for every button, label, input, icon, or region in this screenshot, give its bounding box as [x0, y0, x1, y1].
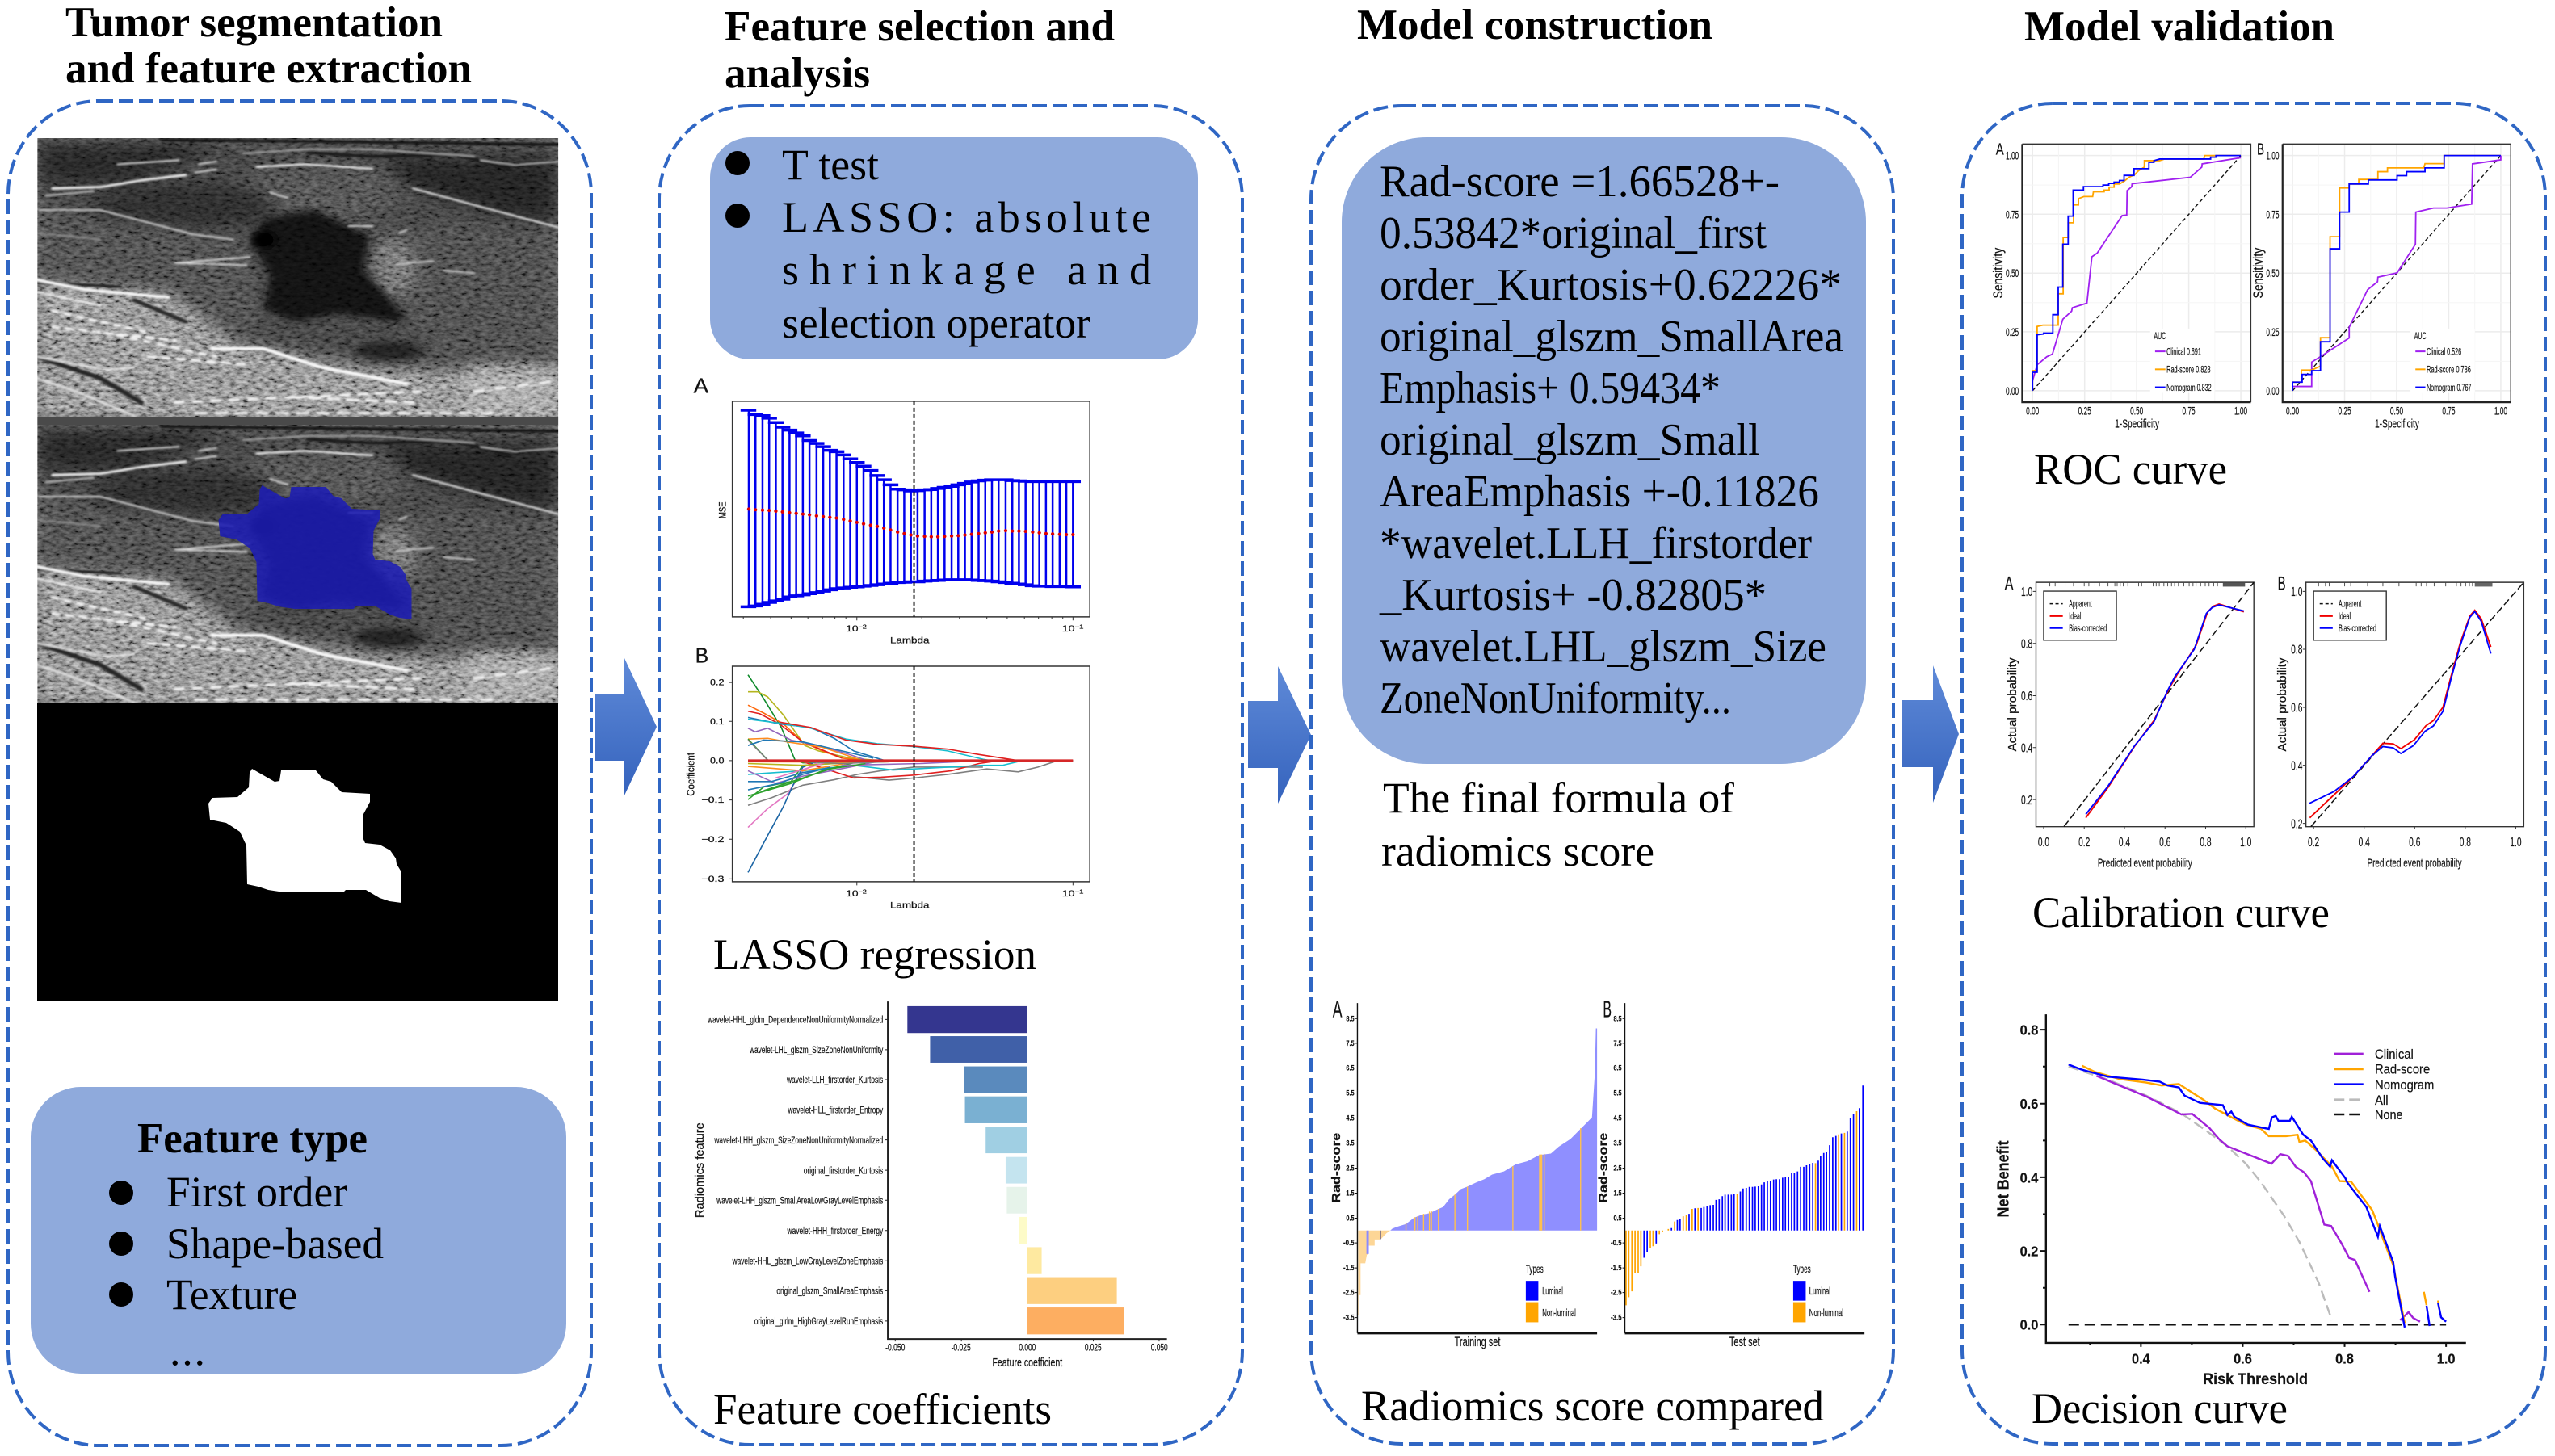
chart: rad-score test set: Test set: [1729, 1335, 1760, 1349]
chart: ROC curve B: 0.75: [2442, 405, 2456, 417]
panel: tumor segmentation: [8, 0, 591, 1446]
chart: feature coefficients bar chart: Radiomics feature: [693, 1122, 707, 1218]
chart: calibration curve A: 0.8: [2200, 835, 2212, 849]
chart: feature coefficients bar chart: [693, 1001, 1168, 1370]
chart: rad-score training set: 2.5: [1346, 1165, 1355, 1173]
chart: feature coefficients bar chart: Feature coefficient: [992, 1356, 1062, 1370]
chart: calibration curve A: 0.4: [2119, 835, 2130, 849]
callout: feature type: Texture: [166, 1270, 297, 1319]
callout: selection methods: selection operator: [782, 299, 1090, 347]
label: LASSO regression: LASSO regression: [713, 930, 1036, 979]
chart: ROC curve B: 0.25: [2338, 405, 2351, 417]
panel: feature selection: [659, 3, 1242, 1445]
chart: ROC curve A: 0.00: [2026, 405, 2039, 417]
callout: radiomics formula: Rad-score =1.66528+-: [1380, 157, 1780, 207]
chart: ROC curve B: 0.50: [2266, 266, 2279, 279]
legend: calibration: Apparent: [2339, 599, 2361, 610]
chart: ROC curve A: Sensitivity: [1991, 247, 2007, 298]
chart: rad-score training set: -0.5: [1343, 1240, 1355, 1248]
chart: feature coefficients bar chart: wavelet-HHL_gldm_DependenceNonUniformityNormalized: [708, 1013, 883, 1025]
chart: ROC curve A: 0.75: [2006, 208, 2019, 221]
legend: AUC: [2410, 329, 2475, 393]
chart: feature coefficients bar chart: wavelet-HLL_firstorder_Entropy: [788, 1104, 883, 1115]
chart: rad-score training set: 1.5: [1346, 1190, 1355, 1198]
chart: rad-score training set: Training set: [1455, 1335, 1501, 1349]
label: radiomics score compared: Radiomics score compared: [1361, 1382, 1824, 1430]
callout: radiomics formula: 0.53842*original_first: [1380, 208, 1767, 258]
heading: tumor segmentation: [65, 0, 472, 92]
chart: calibration curve A: 1.0: [2021, 585, 2032, 598]
chart: rad-score test set: 3.5: [1613, 1140, 1622, 1148]
chart: rad-score test set: 5.5: [1613, 1090, 1622, 1097]
chart: rad-score training set: Rad-score: [1330, 1133, 1343, 1203]
chart: calibration curve A: Actual probability: [2005, 657, 2019, 751]
chart: ROC curve B: B: [2257, 141, 2264, 158]
chart: LASSO coefficient paths: 10: [1062, 890, 1073, 899]
panel: model construction: [1311, 2, 1893, 1444]
binary mask image: [37, 703, 558, 1001]
chart: ROC curve B: 0.75: [2266, 208, 2279, 221]
chart: rad-score test set: 7.5: [1613, 1040, 1622, 1048]
chart: ROC curve A: A: [1996, 141, 2004, 158]
callout: feature type: ...: [170, 1326, 205, 1374]
legend: decision curve: Nomogram: [2375, 1077, 2434, 1093]
chart: LASSO cross-validation MSE: A: [694, 375, 708, 397]
chart: ROC curve B: Rad-score 0.786: [2427, 365, 2471, 376]
heading: tumor segmentation: Tumor segmentation: [65, 0, 443, 46]
callout: radiomics formula: original_glszm_SmallArea: [1380, 312, 1843, 362]
chart: calibration curve B: 0.2: [2291, 817, 2302, 831]
callout: radiomics formula: [1342, 137, 1866, 764]
chart: rad-score training set: 5.5: [1346, 1090, 1355, 1097]
chart: calibration curve B: 1.0: [2291, 585, 2302, 598]
chart: ROC curve A: [1991, 141, 2250, 430]
callout: selection methods: LASSO: absolute: [782, 193, 1151, 241]
chart: rad-score training set: 7.5: [1346, 1040, 1355, 1048]
chart: calibration curve A: 0.8: [2021, 637, 2032, 651]
callout: radiomics formula: *wavelet.LLH_firstorder: [1380, 518, 1812, 569]
legend: decision curve: None: [2375, 1108, 2403, 1122]
chart: ROC curve B: Nomogram 0.767: [2427, 383, 2471, 393]
chart: LASSO coefficient paths: B: [695, 644, 708, 667]
chart: calibration curve A: 0.0: [2038, 835, 2049, 849]
chart: calibration curve B: 0.8: [2460, 835, 2471, 849]
chart: ROC curve B: 0.25: [2266, 325, 2279, 338]
chart: rad-score training set: -1.5: [1343, 1265, 1355, 1273]
chart: calibration curve B: 1.0: [2510, 835, 2522, 849]
chart: ROC curve B: [2251, 141, 2511, 430]
chart: calibration curve B: 0.6: [2409, 835, 2420, 849]
chart: feature coefficients bar chart: wavelet-LHH_glszm_SizeZoneNonUniformityNormalized: [714, 1134, 883, 1145]
chart: LASSO coefficient paths: Coefficient: [685, 753, 697, 796]
chart: rad-score training set: [1330, 996, 1597, 1349]
chart: feature coefficients bar chart: original_firstorder_Kurtosis: [804, 1164, 883, 1176]
chart: rad-score training set: 4.5: [1346, 1115, 1355, 1122]
chart: rad-score training set: 6.5: [1346, 1065, 1355, 1072]
chart: calibration curve A: 0.2: [2078, 835, 2090, 849]
callout: radiomics formula: AreaEmphasis +-0.11826: [1380, 467, 1819, 517]
arrow: step 3 to 4: [1902, 665, 1959, 803]
legend: AUC: AUC: [2414, 331, 2427, 342]
chart: calibration curve B: 0.6: [2291, 701, 2302, 715]
chart: decision curve: 0.6: [2234, 1351, 2252, 1367]
heading: feature selection: analysis: [725, 50, 870, 97]
callout: radiomics formula: wavelet.LHL_glszm_Size: [1380, 622, 1826, 672]
chart: ROC curve B: 1.00: [2266, 149, 2279, 162]
chart: ROC curve A: 1.00: [2234, 405, 2247, 417]
chart: rad-score test set: Non-luminal: [1809, 1307, 1843, 1319]
legend: types: Types: [1526, 1263, 1544, 1275]
legend: calibration: Ideal: [2339, 611, 2351, 622]
chart: calibration curve A: 0.2: [2021, 793, 2032, 807]
chart: decision curve: 1.0: [2437, 1351, 2456, 1367]
label: ROC curve: ROC curve: [2034, 445, 2227, 493]
chart: calibration curve B: B: [2278, 573, 2286, 594]
legend: AUC: AUC: [2154, 331, 2166, 342]
label: final formula: [1381, 774, 1734, 875]
chart: rad-score test set: -1.5: [1611, 1265, 1622, 1273]
legend: types: Types: [1793, 1263, 1811, 1275]
legend: calibration: Bias-corrected: [2339, 623, 2376, 634]
chart: decision curve: Risk Threshold: [2203, 1370, 2308, 1387]
chart: LASSO cross-validation MSE: −2: [858, 623, 867, 630]
arrow: step 1 to 2: [595, 658, 657, 795]
chart: LASSO cross-validation MSE: [694, 375, 1090, 645]
callout: feature type: Feature type: [137, 1115, 368, 1162]
chart: feature coefficients bar chart: wavelet-LLH_firstorder_Kurtosis: [786, 1074, 883, 1085]
chart: LASSO coefficient paths: −0.1: [701, 796, 724, 805]
chart: calibration curve A: 1.0: [2240, 835, 2251, 849]
ultrasound images: [37, 138, 558, 704]
chart: rad-score training set: -2.5: [1343, 1290, 1355, 1297]
chart: rad-score training set: -3.5: [1343, 1315, 1355, 1322]
chart: calibration curve B: 0.8: [2291, 643, 2302, 657]
chart: feature coefficients bar chart: wavelet-LHH_glszm_SmallAreaLowGrayLevelEmphasis: [716, 1194, 883, 1206]
chart: LASSO cross-validation MSE: 10: [1062, 624, 1073, 634]
chart: calibration curve A: Predicted event probability: [2098, 857, 2192, 870]
chart: rad-score test set: -3.5: [1611, 1315, 1622, 1322]
chart: calibration curve B: Actual probability: [2275, 657, 2288, 751]
heading: tumor segmentation: and feature extraction: [65, 45, 472, 92]
panel: model validation: [1962, 3, 2545, 1444]
legend: decision curve: All: [2375, 1093, 2389, 1108]
chart: decision curve: 0.8: [2020, 1022, 2039, 1039]
chart: rad-score training set: 8.5: [1346, 1015, 1355, 1023]
chart: decision curve: 0.4: [2020, 1170, 2039, 1186]
callout: feature type: [31, 1087, 566, 1374]
callout: radiomics formula: order_Kurtosis+0.62226*: [1380, 260, 1842, 310]
legend: types: [1526, 1263, 1576, 1322]
callout: radiomics formula: ZoneNonUniformity...: [1380, 673, 1731, 724]
chart: ROC curve A: Nomogram 0.832: [2166, 383, 2212, 393]
chart: feature coefficients bar chart: 0.000: [1019, 1341, 1036, 1353]
chart: rad-score test set: 1.5: [1613, 1190, 1622, 1198]
chart: decision curve: 0.0: [2020, 1317, 2038, 1333]
chart: decision curve: 0.8: [2335, 1351, 2354, 1367]
chart: rad-score training set: 3.5: [1346, 1140, 1355, 1148]
heading: feature selection: [725, 3, 1115, 97]
chart: feature coefficients bar chart: 0.050: [1151, 1341, 1168, 1353]
chart: feature coefficients bar chart: original_glszm_SmallAreaEmphasis: [776, 1285, 883, 1296]
chart: feature coefficients bar chart: wavelet-LHL_glszm_SizeZoneNonUniformity: [749, 1044, 883, 1055]
callout: feature type: Shape-based: [166, 1219, 384, 1268]
chart: decision curve: [1994, 1014, 2466, 1387]
chart: rad-score test set: 8.5: [1613, 1015, 1622, 1023]
legend: types: [1793, 1263, 1843, 1322]
chart: calibration curve B: 0.2: [2308, 835, 2319, 849]
chart: feature coefficients bar chart: wavelet-HHH_firstorder_Energy: [787, 1225, 883, 1236]
chart: LASSO coefficient paths: −0.3: [701, 875, 724, 884]
legend: calibration: [2313, 591, 2386, 640]
chart: calibration curve A: A: [2005, 573, 2014, 594]
chart: ROC curve B: Sensitivity: [2251, 247, 2267, 298]
legend: calibration: Bias-corrected: [2069, 623, 2107, 634]
chart: ROC curve B: 0.00: [2286, 405, 2299, 417]
chart: rad-score training set: Non-luminal: [1542, 1307, 1576, 1319]
chart: feature coefficients bar chart: original_glrlm_HighGrayLevelRunEmphasis: [754, 1315, 883, 1327]
chart: ROC curve B: 0.00: [2266, 384, 2279, 397]
chart: LASSO coefficient paths: 0.0: [710, 757, 724, 766]
arrow: step 2 to 3: [1248, 666, 1311, 804]
chart: ROC curve A: 0.00: [2006, 384, 2019, 397]
callout: radiomics formula: Emphasis+ 0.59434*: [1380, 363, 1721, 413]
chart: feature coefficients bar chart: wavelet-HHL_glszm_LowGrayLevelZoneEmphasis: [732, 1255, 883, 1266]
chart: calibration curve B: 0.4: [2359, 835, 2370, 849]
chart: LASSO coefficient paths: 10: [846, 890, 856, 899]
chart: decision curve: Net Benefit: [1994, 1140, 2012, 1217]
label: final formula: The final formula of: [1383, 774, 1734, 822]
chart: calibration curve A: [2005, 573, 2254, 870]
chart: ROC curve A: 1.00: [2006, 149, 2019, 162]
legend: types: Luminal: [1542, 1286, 1563, 1297]
chart: ROC curve B: 1-Specificity: [2375, 417, 2419, 430]
callout: selection methods: T test: [782, 141, 879, 189]
chart: LASSO coefficient paths: −2: [858, 888, 867, 896]
chart: rad-score test set: Rad-score: [1596, 1133, 1610, 1203]
callout: selection methods: [710, 137, 1198, 359]
chart: decision curve: 0.4: [2132, 1351, 2150, 1367]
chart: ROC curve B: 0.50: [2390, 405, 2403, 417]
chart: decision curve: 0.2: [2020, 1244, 2038, 1260]
legend: calibration: Ideal: [2069, 611, 2081, 622]
heading: model validation: Model validation: [2024, 3, 2334, 50]
chart: LASSO coefficient paths: Lambda: [890, 900, 930, 910]
callout: radiomics formula: _Kurtosis+ -0.82805*: [1379, 570, 1767, 620]
chart: LASSO coefficient paths: −1: [1075, 888, 1083, 896]
label: feature coefficients: Feature coefficients: [713, 1385, 1052, 1433]
chart: feature coefficients bar chart: -0.050: [885, 1341, 906, 1353]
chart: rad-score test set: B: [1603, 996, 1612, 1022]
legend: decision curve: [2334, 1047, 2434, 1122]
legend: decision curve: Clinical: [2375, 1047, 2414, 1062]
chart: calibration curve B: 0.4: [2291, 759, 2302, 773]
chart: LASSO cross-validation MSE: MSE: [717, 501, 729, 518]
chart: ROC curve A: 1-Specificity: [2115, 417, 2159, 430]
legend: types: Luminal: [1809, 1286, 1830, 1297]
chart: calibration curve A: 0.4: [2021, 741, 2032, 755]
chart: calibration curve A: 0.6: [2159, 835, 2170, 849]
chart: rad-score test set: 4.5: [1613, 1115, 1622, 1122]
chart: LASSO coefficient paths: [685, 644, 1090, 910]
chart: LASSO coefficient paths: 0.2: [710, 678, 724, 688]
chart: feature coefficients bar chart: -0.025: [952, 1341, 971, 1353]
chart: rad-score test set: 2.5: [1613, 1165, 1622, 1173]
chart: rad-score training set: 0.5: [1346, 1215, 1355, 1223]
legend: calibration: [2044, 591, 2116, 640]
legend: AUC: Clinical 0.526: [2427, 347, 2461, 358]
chart: rad-score training set: A: [1333, 996, 1343, 1022]
legend: AUC: Clinical 0.691: [2166, 347, 2201, 358]
chart: LASSO cross-validation MSE: −1: [1075, 623, 1083, 630]
chart: feature coefficients bar chart: 0.025: [1085, 1341, 1102, 1353]
chart: rad-score test set: 6.5: [1613, 1065, 1622, 1072]
heading: model construction: Model construction: [1357, 2, 1712, 48]
chart: rad-score test set: -2.5: [1611, 1290, 1622, 1297]
callout: radiomics formula: original_glszm_Small: [1380, 415, 1760, 465]
chart: ROC curve A: 0.75: [2183, 405, 2196, 417]
chart: ROC curve B: 1.00: [2494, 405, 2507, 417]
chart: LASSO coefficient paths: 0.1: [710, 717, 724, 727]
chart: rad-score test set: 0.5: [1613, 1215, 1622, 1223]
chart: decision curve: 0.6: [2020, 1097, 2038, 1112]
chart: rad-score test set: -0.5: [1611, 1240, 1622, 1248]
label: calibration curve: Calibration curve: [2032, 888, 2330, 937]
chart: calibration curve A: 0.6: [2021, 689, 2032, 703]
callout: selection methods: shrinkage and: [782, 245, 1151, 294]
chart: ROC curve A: 0.50: [2006, 266, 2019, 279]
chart: ROC curve A: Rad-score 0.828: [2166, 365, 2211, 376]
chart: ROC curve A: 0.50: [2130, 405, 2143, 417]
legend: decision curve: Rad-score: [2375, 1062, 2430, 1077]
label: decision curve: Decision curve: [2032, 1384, 2288, 1433]
legend: calibration: Apparent: [2069, 599, 2092, 610]
chart: ROC curve A: 0.25: [2078, 405, 2091, 417]
chart: LASSO cross-validation MSE: 10: [846, 624, 856, 634]
chart: LASSO cross-validation MSE: Lambda: [890, 636, 930, 645]
heading: feature selection: Feature selection and: [725, 3, 1115, 50]
chart: ROC curve A: 0.25: [2006, 325, 2019, 338]
chart: calibration curve B: [2275, 573, 2523, 870]
callout: feature type: First order: [166, 1168, 347, 1216]
chart: rad-score test set: [1596, 996, 1864, 1349]
label: final formula: radiomics score: [1381, 827, 1654, 875]
segmentation overlay: blue tumor mask: [218, 485, 412, 619]
chart: LASSO coefficient paths: −0.2: [701, 835, 724, 845]
legend: AUC: [2150, 329, 2214, 393]
